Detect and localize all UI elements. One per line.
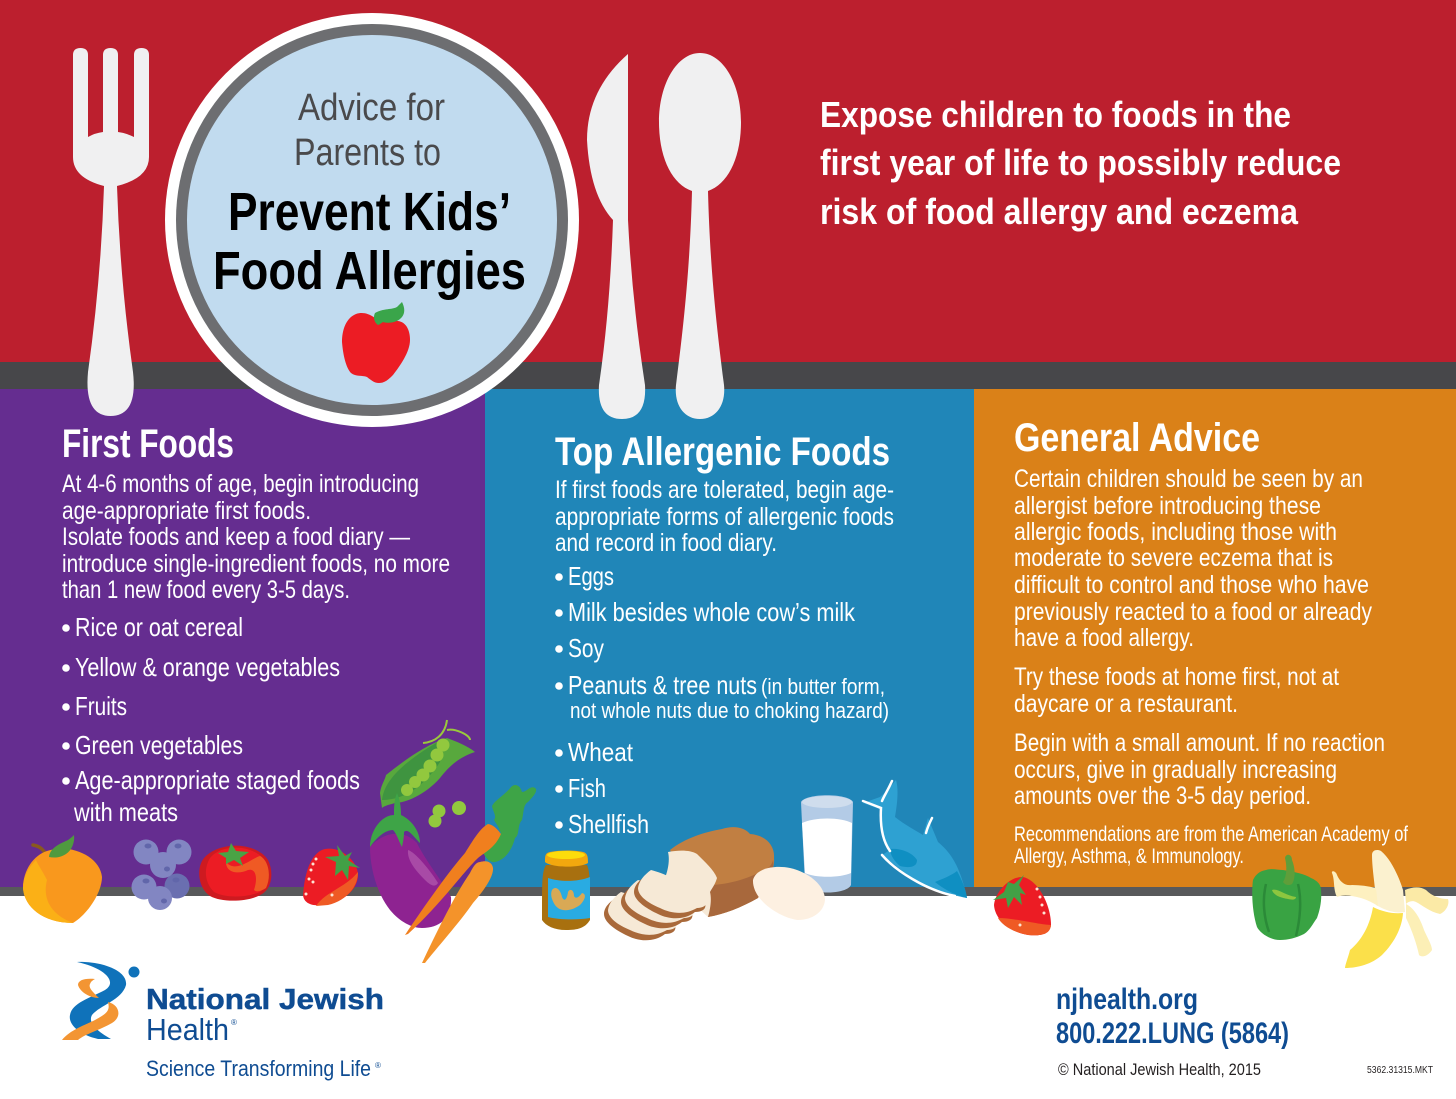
icon: banana bbox=[1332, 850, 1448, 968]
bullet list: Eggs bbox=[568, 561, 614, 591]
text block: advice: Try these foods at home first, not at bbox=[1014, 663, 1339, 691]
text block: intro: At 4-6 months of age, begin introducing bbox=[62, 470, 419, 498]
bread slices bbox=[604, 870, 707, 940]
text block: advice: allergist before introducing these bbox=[1014, 492, 1321, 520]
text block: source note: Allergy, Asthma, & Immunology. bbox=[1014, 845, 1244, 868]
panel: top allergenic foods background bbox=[485, 389, 974, 887]
bullet list: with meats bbox=[73, 797, 178, 827]
logo: National Jewish Health bbox=[62, 962, 384, 1081]
text block: advice: Begin with a small amount. If no reaction bbox=[1014, 729, 1385, 757]
logo: National Jewish Health: National Jewish bbox=[146, 984, 384, 1016]
text block: advice: amounts over the 3-5 day period. bbox=[1014, 782, 1311, 810]
plate with title bbox=[165, 13, 579, 427]
logo: National Jewish Health: Science Transforming Life bbox=[146, 1056, 371, 1081]
text block: intro: appropriate forms of allergenic foods bbox=[555, 503, 894, 531]
heading: top allergenic foods: Top Allergenic Foods bbox=[555, 430, 890, 474]
bullet list bbox=[62, 612, 360, 827]
icon: peach bbox=[23, 835, 102, 923]
allergenic foods text bbox=[555, 430, 894, 839]
icon: green pepper bbox=[1252, 855, 1321, 940]
bullet list: not whole nuts due to choking hazard) bbox=[570, 698, 889, 723]
text block: intro: If first foods are tolerated, begin age- bbox=[555, 476, 894, 504]
icon: apple bbox=[342, 302, 410, 383]
bullet list: Milk besides whole cow’s milk bbox=[568, 597, 856, 627]
bullet list: Yellow & orange vegetables bbox=[75, 652, 340, 682]
text block: advice: occurs, give in gradually increasing bbox=[1014, 756, 1337, 784]
header message: Expose children to foods in the bbox=[820, 94, 1291, 135]
contact details: njhealth.org bbox=[1056, 983, 1198, 1016]
header message bbox=[820, 94, 1341, 232]
text block: intro: introduce single-ingredient foods, no more bbox=[62, 550, 450, 578]
bullet list: Fish bbox=[568, 773, 606, 803]
icon: blueberries bbox=[132, 840, 192, 910]
text block: advice bbox=[1014, 465, 1385, 810]
text block: intro: than 1 new food every 3-5 days. bbox=[62, 576, 350, 604]
bullet list bbox=[555, 561, 889, 839]
icon: eggplant bbox=[370, 793, 451, 928]
bullet list: Rice or oat cereal bbox=[75, 612, 243, 642]
title: Prevent Kids’ bbox=[228, 182, 511, 242]
header message: risk of food allergy and eczema bbox=[820, 191, 1299, 232]
text block: advice: difficult to control and those who have bbox=[1014, 571, 1369, 599]
table edge strip bbox=[0, 887, 1456, 896]
text block: intro: age-appropriate first foods. bbox=[62, 497, 311, 525]
icon: strawberry bbox=[303, 845, 360, 906]
header message: first year of life to possibly reduce bbox=[820, 142, 1341, 183]
panel: general advice background bbox=[974, 389, 1456, 887]
icon: egg bbox=[753, 867, 825, 920]
bullet list: Green vegetables bbox=[75, 730, 243, 760]
icon: glass of milk bbox=[801, 795, 853, 892]
title: Parents to bbox=[294, 132, 441, 174]
icon: spoon bbox=[659, 53, 741, 419]
icon: bread bbox=[604, 827, 774, 940]
title: Advice for bbox=[298, 87, 445, 129]
dark band bbox=[0, 362, 1456, 389]
icon: fork bbox=[73, 48, 149, 416]
icon: fish bbox=[863, 780, 967, 898]
contact details: © National Jewish Health, 2015 bbox=[1058, 1060, 1261, 1079]
title: Food Allergies bbox=[213, 241, 526, 301]
icon: knife bbox=[587, 54, 645, 419]
text block: advice: have a food allergy. bbox=[1014, 624, 1194, 652]
contact details: 5362.31315.MKT bbox=[1367, 1065, 1433, 1076]
logo: National Jewish Health: Health bbox=[146, 1012, 229, 1047]
bullet list: (in butter form, bbox=[761, 674, 885, 699]
general advice text bbox=[1014, 416, 1408, 868]
contact details bbox=[1056, 983, 1433, 1079]
bullet list: Fruits bbox=[75, 691, 127, 721]
logo: National Jewish Health: ® bbox=[231, 1018, 237, 1027]
first foods text bbox=[62, 422, 450, 827]
heading: first foods: First Foods bbox=[62, 422, 234, 466]
icon: pea pod bbox=[380, 720, 475, 828]
text block: intro bbox=[555, 476, 894, 557]
text block: advice: previously reacted to a food or already bbox=[1014, 598, 1372, 626]
icon: strawberry bbox=[993, 875, 1051, 935]
bullet list: Peanuts & tree nuts bbox=[568, 670, 757, 700]
icon: peanut butter jar bbox=[542, 850, 590, 930]
bullet list: Age-appropriate staged foods bbox=[75, 765, 360, 795]
red header band bbox=[0, 0, 1456, 362]
text block: intro bbox=[62, 470, 450, 604]
icon: tomato bbox=[199, 843, 271, 901]
bullet list: Wheat bbox=[568, 737, 634, 767]
heading: general advice: General Advice bbox=[1014, 416, 1260, 460]
bullet list: Shellfish bbox=[568, 809, 649, 839]
contact details: 800.222.LUNG (5864) bbox=[1056, 1017, 1289, 1050]
bullet list: Soy bbox=[568, 633, 604, 663]
text block: advice: daycare or a restaurant. bbox=[1014, 690, 1238, 718]
text block: advice: Certain children should be seen by an bbox=[1014, 465, 1363, 493]
title bbox=[213, 87, 526, 301]
icon: carrots bbox=[405, 785, 536, 963]
text block: source note bbox=[1014, 823, 1408, 868]
logo: National Jewish Health: ® bbox=[375, 1061, 381, 1070]
text block: intro: Isolate foods and keep a food diary — bbox=[62, 523, 410, 551]
text block: advice: allergic foods, including those with bbox=[1014, 518, 1337, 546]
text block: intro: and record in food diary. bbox=[555, 529, 777, 557]
panel: first foods background bbox=[0, 389, 485, 887]
text block: advice: moderate to severe eczema that is bbox=[1014, 544, 1333, 572]
icon: helix mark bbox=[62, 962, 140, 1040]
